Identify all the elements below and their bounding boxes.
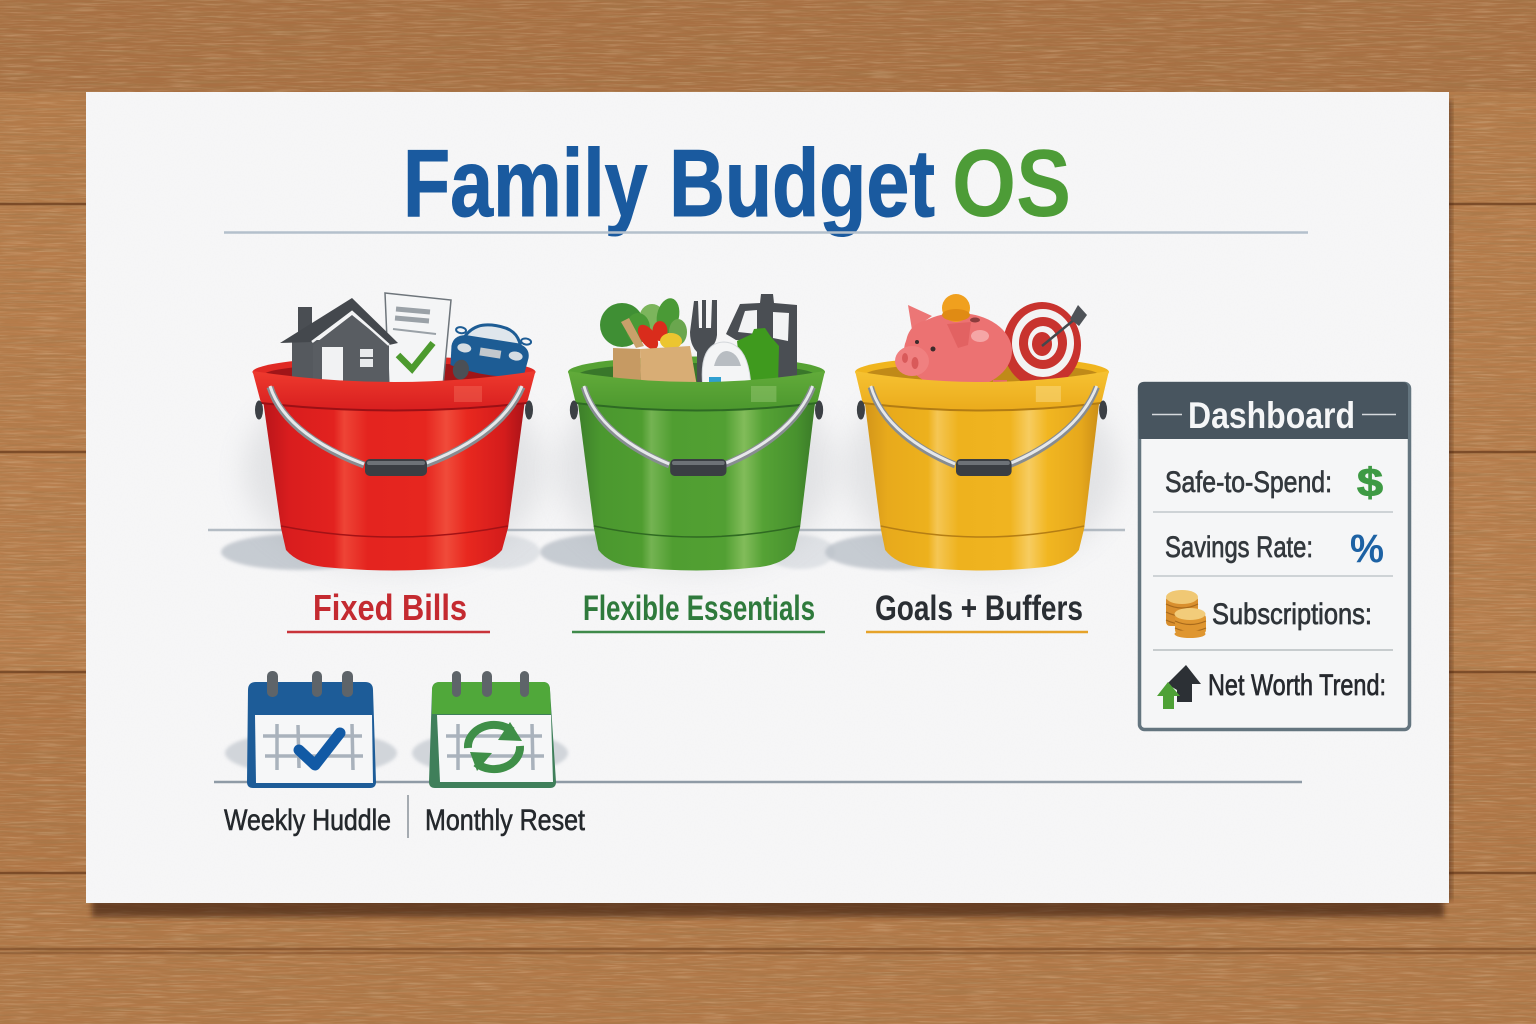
icon: refresh arrows (468, 722, 522, 771)
label: goals and buffers: Goals + Buffers (875, 589, 1083, 628)
dashboard header (1138, 382, 1408, 439)
bucket body (864, 400, 1100, 570)
icon: grocery bag (613, 346, 698, 392)
icon: house (280, 298, 398, 386)
row: savings rate: % (1350, 527, 1384, 571)
bucket body (578, 400, 815, 570)
icon: fork (690, 300, 717, 386)
bucket handle (871, 386, 1097, 476)
row: safe to spend (1165, 461, 1383, 505)
row: savings rate: Savings Rate: (1165, 531, 1313, 564)
bucket side pivots (857, 400, 1107, 420)
label: fixed bills: Fixed Bills (313, 587, 467, 628)
calendar shadows and floor line (214, 731, 1302, 782)
icon: leaves (600, 296, 687, 348)
icon: jug (726, 294, 797, 386)
bucket handle (584, 386, 813, 476)
icon: trend arrows (1157, 665, 1201, 709)
icon: monthly calendar (429, 671, 556, 788)
label: weekly huddle: Weekly Huddle (224, 804, 391, 837)
row: net worth trend: Net Worth Trend: (1208, 669, 1386, 702)
row: subscriptions: Subscriptions: (1212, 598, 1372, 631)
icon: peppers and lemon (634, 321, 682, 353)
row: savings rate (1165, 527, 1384, 571)
icon: green bottle (737, 328, 779, 386)
icon: document with check (385, 293, 451, 386)
row: safe to spend: Safe-to-Spend: (1165, 466, 1332, 499)
dashboard header: Dashboard (1188, 395, 1355, 436)
divider between rhythm labels (407, 795, 409, 838)
title: Family Budget (403, 130, 935, 237)
title rule (224, 231, 1308, 234)
bucket: fixed bills (244, 293, 544, 570)
bucket body (263, 400, 525, 570)
bucket side pivots (255, 400, 533, 420)
label: flexible essentials: Flexible Essentials (583, 589, 815, 628)
bucket: flexible essentials (558, 294, 834, 570)
bucket side pivots (570, 400, 823, 420)
icon: car (446, 319, 533, 390)
row: subscriptions (1166, 590, 1372, 638)
icon: piggy bank (895, 294, 1012, 390)
bucket handle (270, 386, 522, 476)
shelf line and shadows (208, 530, 1125, 570)
title: OS (952, 130, 1071, 237)
row: net worth trend (1157, 665, 1386, 709)
icon: coin stacks (1166, 590, 1206, 638)
icon: white bottle (702, 342, 751, 388)
icon: target (1003, 302, 1087, 388)
bucket: goals and buffers (846, 294, 1118, 570)
panel: dashboard (1138, 382, 1410, 730)
icon: coin (942, 294, 970, 322)
icon: weekly calendar (247, 671, 376, 788)
paper card (86, 92, 1452, 917)
row: safe to spend: $ (1357, 461, 1383, 505)
label: monthly reset: Monthly Reset (425, 804, 586, 837)
